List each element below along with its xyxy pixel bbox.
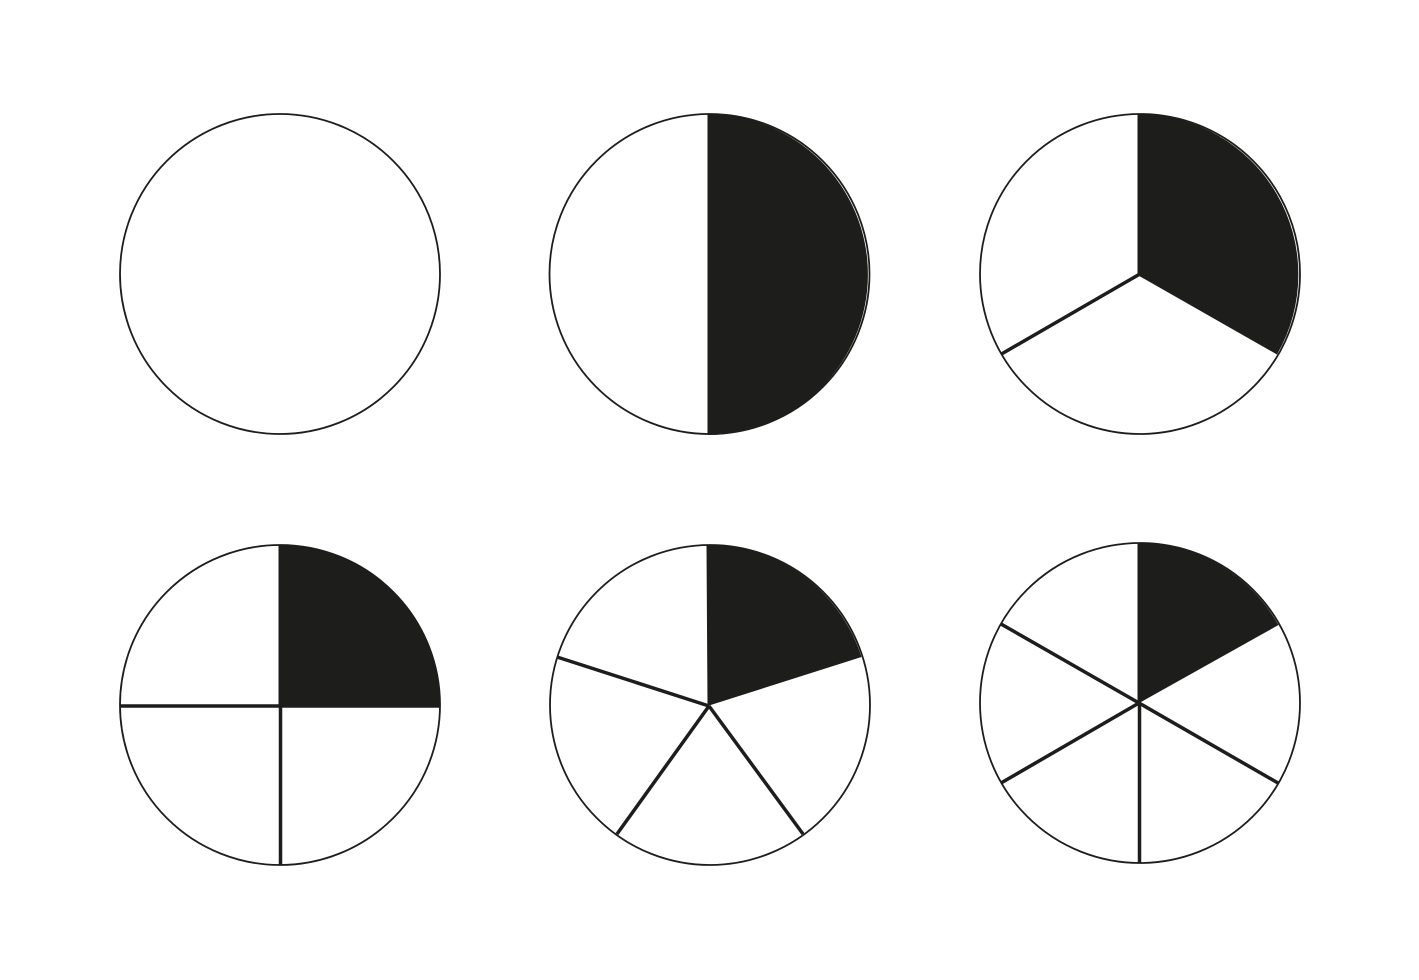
- pie: one third filled: [980, 114, 1300, 434]
- pie: one half filled: [550, 114, 870, 435]
- pie: one fifth filled: [550, 545, 870, 865]
- pie: one sixth filled: [980, 543, 1300, 863]
- pie: one quarter filled: [120, 545, 440, 865]
- pie: whole empty circle: [120, 114, 440, 434]
